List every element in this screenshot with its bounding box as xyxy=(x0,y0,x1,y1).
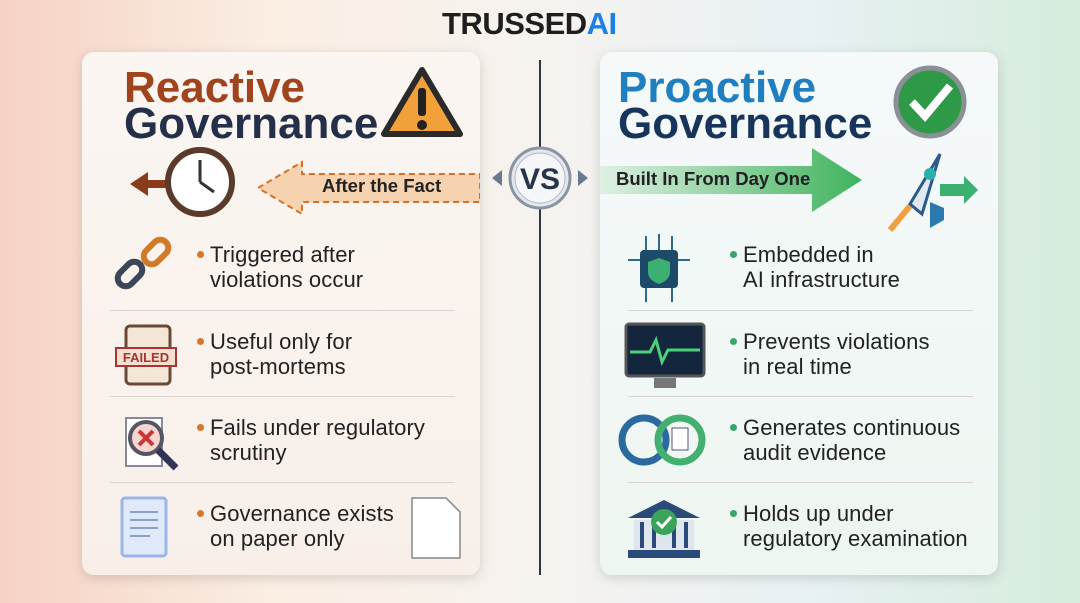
icon: magnifier x xyxy=(125,417,178,470)
item 1 xyxy=(730,242,900,292)
item 2 xyxy=(197,329,352,379)
item 1 xyxy=(197,242,363,292)
heading: reactive xyxy=(124,63,378,148)
item 2: post-mortems xyxy=(210,354,346,379)
vs badge xyxy=(492,146,588,210)
item 3: Generates continuous xyxy=(743,415,960,440)
divider line xyxy=(539,60,541,575)
arrow: after the fact xyxy=(258,160,480,214)
icon: failed clipboard xyxy=(115,324,177,386)
icon: chip shield xyxy=(628,234,690,302)
item 3 xyxy=(197,415,425,465)
item 3 xyxy=(730,415,960,465)
item 2: Useful only for xyxy=(210,329,352,354)
icon: monitor heartbeat xyxy=(624,322,706,388)
heading: reactive: Reactive xyxy=(124,63,305,112)
panel: proactive xyxy=(600,52,998,575)
icon: institution xyxy=(628,500,700,558)
icon: failed clipboard: FAILED xyxy=(123,350,169,365)
icon: broken chain xyxy=(114,236,172,290)
item 1: Embedded in xyxy=(743,242,874,267)
item 3: scrutiny xyxy=(210,440,287,465)
item 4: Governance exists xyxy=(210,501,394,526)
item 2 xyxy=(730,329,930,379)
item 4: regulatory examination xyxy=(743,526,968,551)
item 3: Fails under regulatory xyxy=(210,415,425,440)
heading: proactive: Governance xyxy=(618,99,872,148)
item 4: Holds up under xyxy=(743,501,894,526)
heading: reactive: Governance xyxy=(124,99,378,148)
arrow: built in from day one: Built In From Day One xyxy=(616,168,810,189)
item 3: audit evidence xyxy=(743,440,886,465)
item 4 xyxy=(730,501,968,551)
item 4: on paper only xyxy=(210,526,345,551)
icon: paper documents xyxy=(120,496,168,558)
item 2: in real time xyxy=(743,354,852,379)
item 1: AI infrastructure xyxy=(743,267,900,292)
logo: TRUSSEDAI xyxy=(442,6,617,41)
heading: proactive xyxy=(618,63,872,148)
icon: blank page xyxy=(411,497,461,559)
icon: rocket xyxy=(888,153,978,232)
icon: check badge xyxy=(894,66,966,138)
panel: reactive xyxy=(82,52,480,575)
item 2: Prevents violations xyxy=(743,329,930,354)
heading: proactive: Proactive xyxy=(618,63,816,112)
arrow: after the fact: After the Fact xyxy=(322,175,441,196)
arrow: built in from day one xyxy=(600,148,862,212)
item 1: Triggered after xyxy=(210,242,355,267)
icon: cycle xyxy=(618,414,706,466)
icon: clock xyxy=(130,147,235,217)
icon: warning xyxy=(381,67,463,137)
item 1: violations occur xyxy=(210,267,363,292)
vs badge: VS xyxy=(520,163,560,196)
item 4 xyxy=(197,501,394,551)
